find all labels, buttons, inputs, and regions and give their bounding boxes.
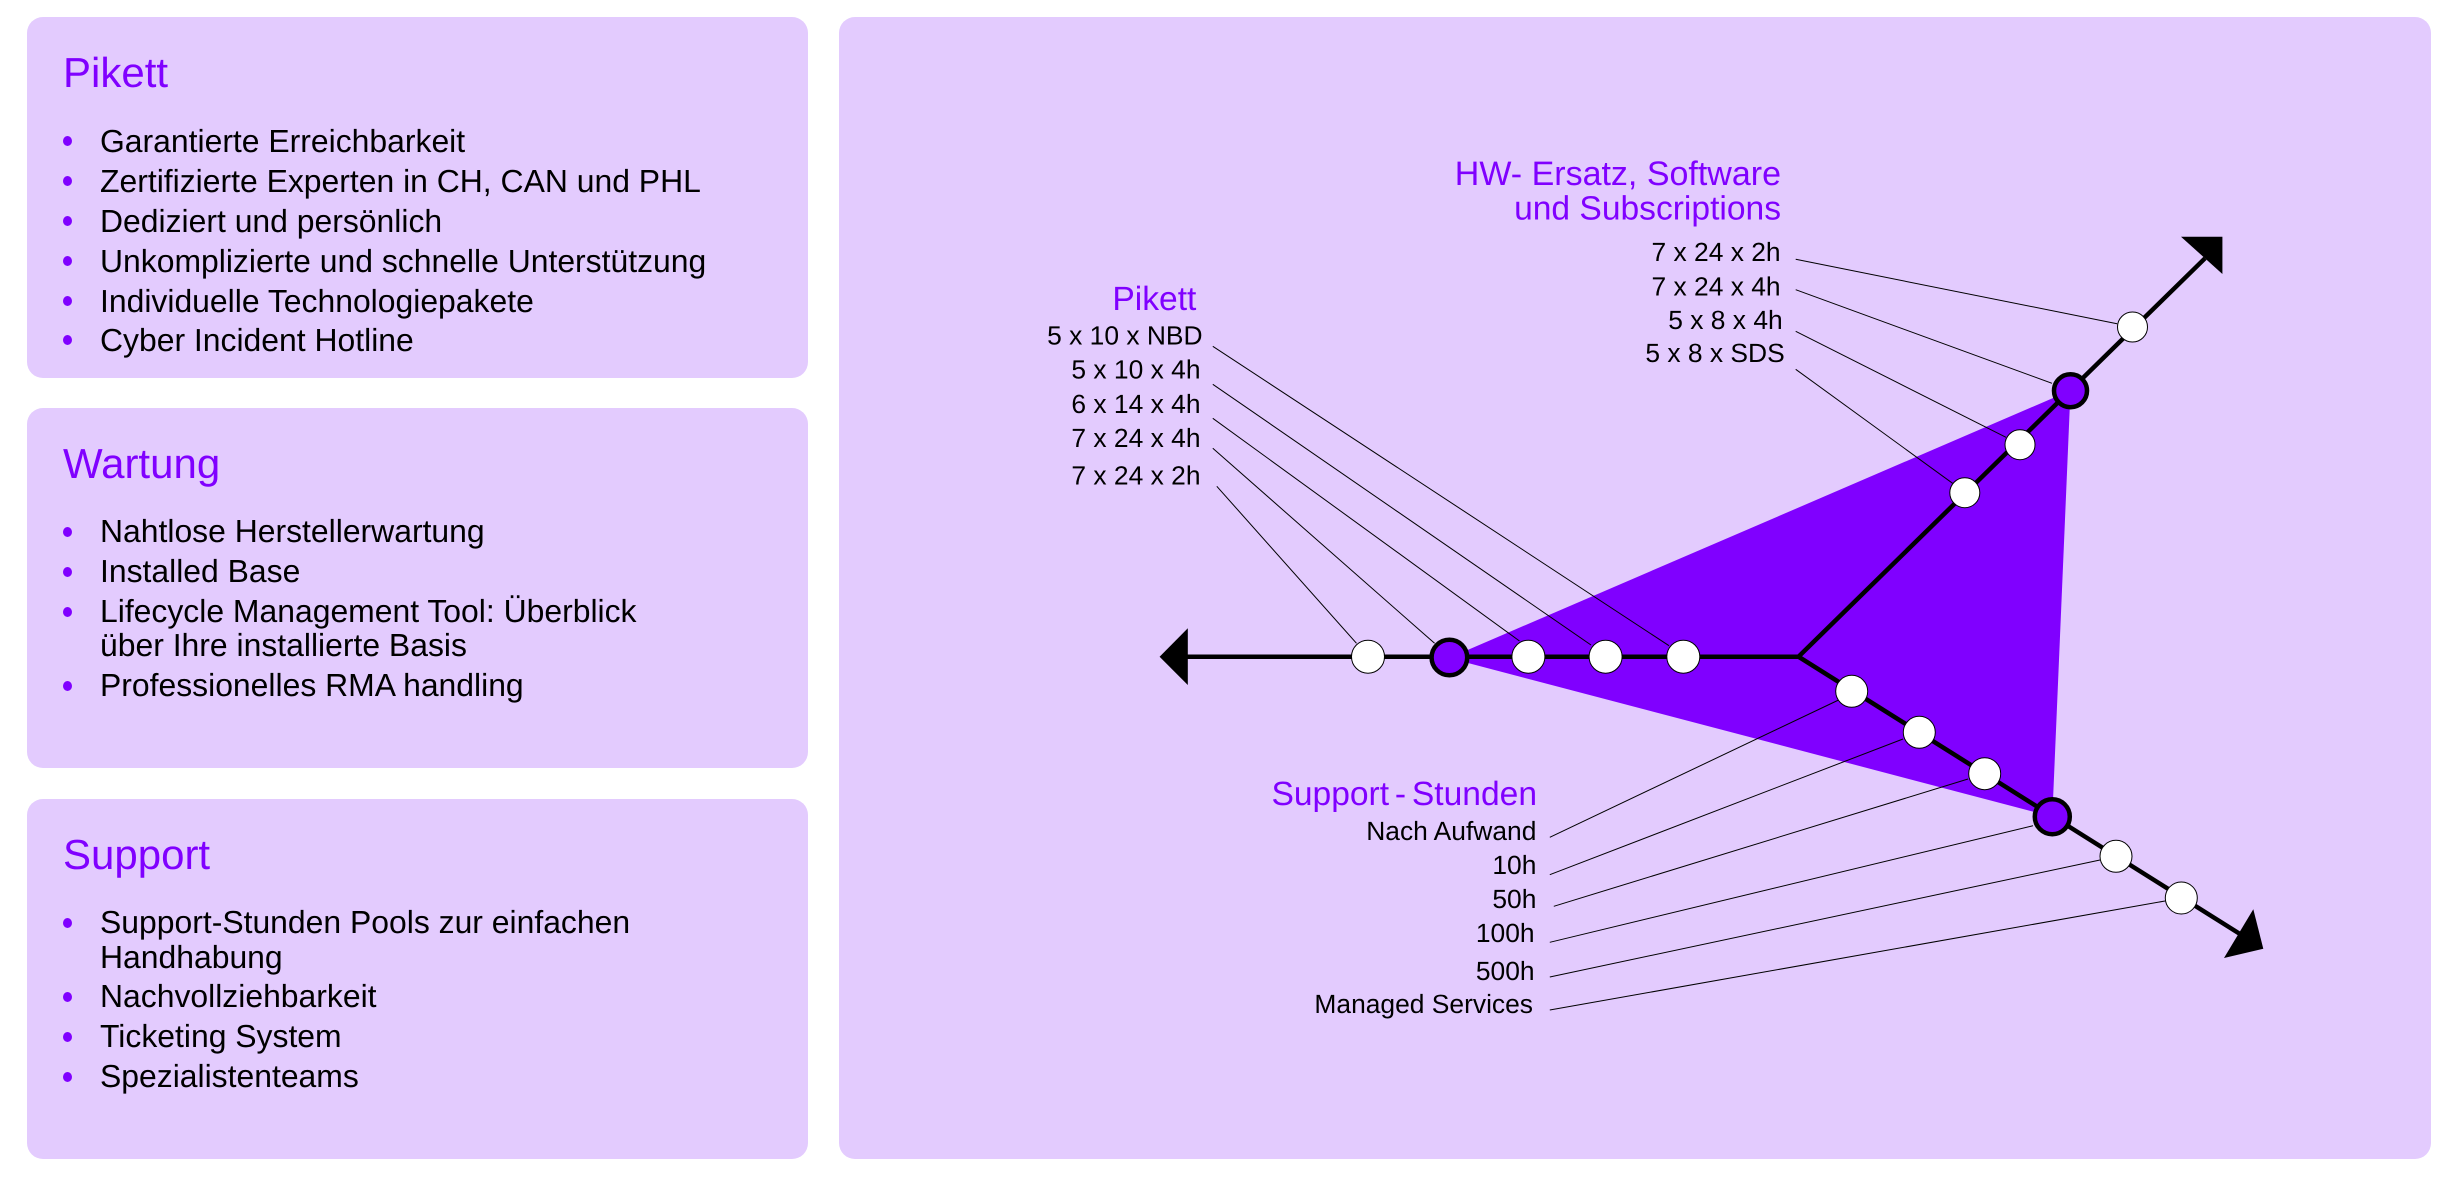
list: Wartung benefits: Installed Base (100, 553, 300, 589)
labels: HW-Ersatz, Software und Subscriptions (1455, 155, 1785, 368)
panel: Wartung (27, 408, 808, 768)
heading: Wartung: Wartung (63, 440, 220, 487)
labels: Support-Stunden: 500h (1476, 956, 1535, 986)
list: Pikett benefits: Garantierte Erreichbarkeit (100, 123, 465, 159)
leader lines: Support-Stunden (1550, 700, 2165, 1010)
axis: Pikett, pointing left (1160, 628, 1798, 685)
labels: Support-Stunden: Support - Stunden (1271, 776, 1537, 813)
labels: Support-Stunden: 100h (1476, 918, 1535, 948)
heading: Pikett: Pikett (63, 49, 168, 96)
labels: HW-Ersatz, Software und Subscriptions: HW- Ersatz, Software (1455, 155, 1781, 193)
markers: HW-Ersatz axis (1950, 312, 2148, 508)
list: Pikett benefits: Zertifizierte Experten in CH, CAN und PHL (100, 163, 701, 199)
labels: HW-Ersatz, Software und Subscriptions: und Subscriptions (1514, 190, 1781, 228)
labels: Pikett: 5 x 10 x 4h (1071, 354, 1200, 384)
labels: HW-Ersatz, Software und Subscriptions: 5 x 8 x 4h (1668, 305, 1783, 335)
list: Support benefits: Spezialistenteams (100, 1058, 359, 1094)
panel: service level diagram (839, 17, 2431, 1159)
list: Support benefits: Ticketing System (100, 1018, 342, 1054)
labels: Support-Stunden: Managed Services (1314, 989, 1533, 1019)
list: Support benefits: Support-Stunden Pools zur einfachen (100, 904, 630, 940)
list: Support benefits (63, 904, 630, 1094)
panel: Support (27, 799, 808, 1159)
heading: Support: Support (63, 831, 210, 878)
labels: Pikett: 5 x 10 x NBD (1047, 320, 1203, 350)
leader lines: HW-Ersatz (1796, 259, 2117, 483)
labels: Pikett: Pikett (1112, 281, 1197, 318)
list: Pikett benefits: Dediziert und persönlich (100, 203, 442, 239)
labels: Support-Stunden: 10h (1492, 850, 1536, 880)
labels: Pikett: 6 x 14 x 4h (1071, 389, 1200, 419)
labels: Support-Stunden: 50h (1492, 884, 1536, 914)
list: Support benefits: Nachvollziehbarkeit (100, 978, 377, 1014)
labels: Pikett: 7 x 24 x 4h (1071, 423, 1200, 453)
list: Pikett benefits (63, 123, 706, 358)
list: Wartung benefits: Lifecycle Management Tool: Überblick (100, 593, 637, 629)
labels: HW-Ersatz, Software und Subscriptions: 7 x 24 x 4h (1651, 272, 1781, 302)
list: Wartung benefits: Professionelles RMA handling (100, 667, 524, 703)
panel: Pikett (27, 17, 808, 378)
list: Wartung benefits: Nahtlose Herstellerwartung (100, 513, 485, 549)
list: Pikett benefits: Individuelle Technologiepakete (100, 283, 534, 319)
labels: Support-Stunden: Nach Aufwand (1366, 816, 1536, 846)
list: Wartung benefits: über Ihre installierte Basis (100, 627, 467, 663)
leader lines: Pikett (1213, 346, 1669, 646)
labels: HW-Ersatz, Software und Subscriptions: 5 x 8 x SDS (1645, 338, 1785, 368)
chart: filled service triangle (1449, 390, 2070, 817)
markers: Support-Stunden axis (1836, 675, 2197, 914)
labels: Pikett (1047, 281, 1203, 490)
axis: Support-Stunden, pointing down right (1798, 657, 2263, 958)
list: Pikett benefits: Cyber Incident Hotline (100, 322, 414, 358)
list: Support benefits: Handhabung (100, 939, 283, 975)
labels: Support-Stunden (1271, 776, 1537, 1019)
list: Pikett benefits: Unkomplizierte und schnelle Unterstützung (100, 243, 706, 279)
labels: HW-Ersatz, Software und Subscriptions: 7 x 24 x 2h (1651, 237, 1781, 267)
markers: Pikett axis (1352, 640, 1700, 675)
list: Wartung benefits (63, 513, 637, 703)
labels: Pikett: 7 x 24 x 2h (1071, 460, 1200, 490)
axis: HW-Ersatz, pointing up right (1798, 237, 2222, 657)
